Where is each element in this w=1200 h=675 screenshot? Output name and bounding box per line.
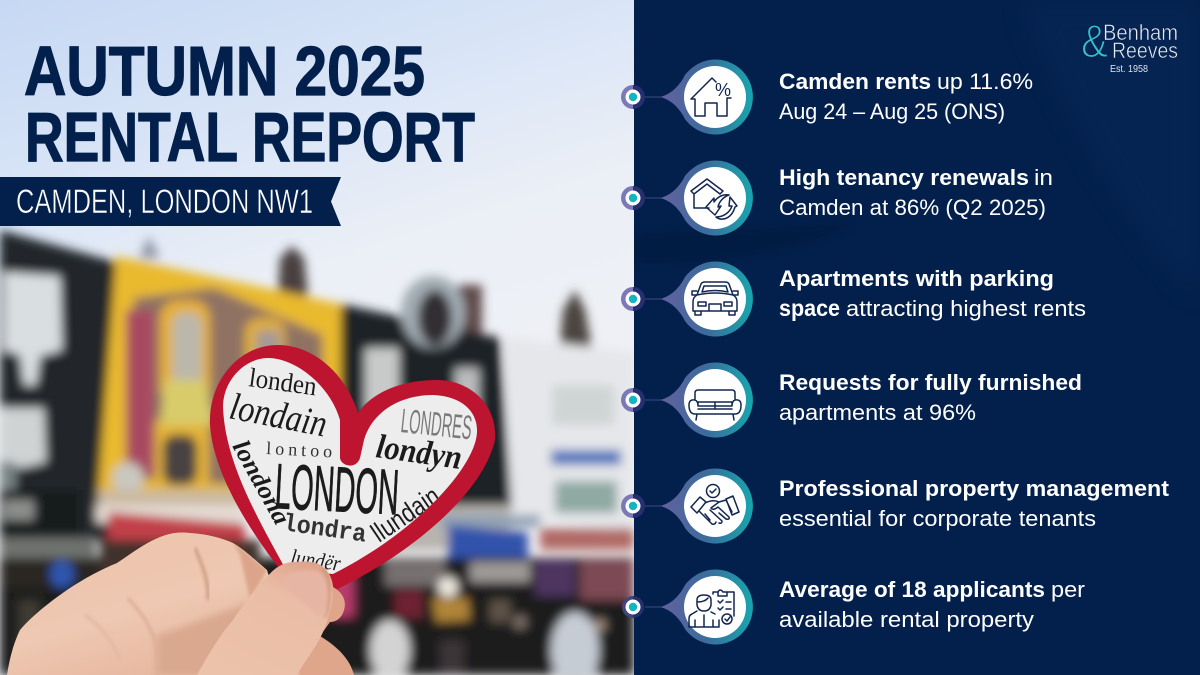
- item 6: applicants: [622, 569, 1086, 644]
- logo: Est. 1958: [1110, 63, 1148, 75]
- text 5: [779, 476, 1170, 531]
- text 6: available rental property: [779, 607, 1035, 632]
- text 3: Apartments with parking: [779, 266, 1054, 291]
- hand holding heart: [7, 532, 354, 675]
- item 2: tenancy renewals: [621, 160, 1053, 235]
- text 1: Aug 24 – Aug 25 (ONS): [779, 99, 1005, 124]
- pin and icon: house with renewal arrows: [660, 160, 753, 235]
- location ribbon: CAMDEN, LONDON NW1: [16, 183, 313, 221]
- logo: Reeves: [1112, 38, 1178, 63]
- back fingers: [299, 587, 354, 675]
- heart words: llundain: [366, 481, 445, 548]
- heart words: londain: [226, 386, 330, 446]
- logo: Benham: [1103, 20, 1178, 45]
- heart words: lontoo: [266, 438, 333, 461]
- index finger and palm: [7, 532, 300, 675]
- item 1: Camden rents: [621, 59, 1033, 134]
- heart words: lundër: [289, 544, 343, 576]
- heart words: londyn: [374, 428, 464, 477]
- text 5: essential for corporate tenants: [779, 506, 1096, 531]
- connector dot 3: [621, 287, 661, 311]
- text 4: Requests for fully furnished: [779, 370, 1082, 395]
- text 3: attracting highest rents: [846, 296, 1086, 321]
- text 6: [779, 577, 1086, 632]
- text 1: Camden rents: [779, 69, 931, 94]
- heart sticker: LONDRES: [399, 402, 474, 447]
- logo: &: [1081, 15, 1108, 67]
- pin and icon: car: [660, 261, 753, 336]
- item 4: furnished: [621, 362, 1082, 437]
- text 6: per: [1051, 577, 1086, 602]
- heart words: londen: [247, 362, 319, 401]
- thumbnail highlight: [287, 570, 327, 596]
- pin and icon: house with percent: [660, 59, 753, 134]
- connector dot 2: [621, 186, 661, 210]
- text 2: Camden at 86% (Q2 2025): [779, 195, 1046, 220]
- text 2: [779, 165, 1053, 220]
- blurred buildings: [0, 230, 634, 675]
- text 3: space: [779, 295, 840, 321]
- pin and icon: house with percent: %: [715, 80, 731, 100]
- heart words: londra: [281, 509, 368, 550]
- heart sticker: [210, 345, 495, 590]
- thumb: [197, 561, 333, 675]
- text 2: in: [1034, 165, 1053, 190]
- title: [24, 32, 475, 176]
- text 6: Average of 18 applicants: [779, 577, 1045, 602]
- heart words: [226, 362, 474, 576]
- pin and icon: applicant with clipboard: [660, 569, 753, 644]
- connector dot 4: [621, 388, 661, 412]
- text 1: [779, 69, 1033, 124]
- text 4: apartments at 96%: [779, 400, 976, 425]
- heart words: londona: [227, 436, 295, 529]
- item 5: property management: [621, 468, 1170, 543]
- location ribbon: [0, 177, 341, 226]
- item 3: parking: [621, 261, 1086, 336]
- panel: navy background: [638, 229, 827, 259]
- panel: street photo background: [0, 0, 634, 675]
- text 1: up 11.6%: [937, 69, 1033, 94]
- text 5: Professional property management: [779, 476, 1170, 501]
- connector dot 5: [621, 494, 661, 518]
- pin and icon: handshake: [660, 468, 753, 543]
- title: AUTUMN 2025: [24, 32, 425, 110]
- pin and icon: sofa: [660, 362, 753, 437]
- logo: [1081, 15, 1178, 75]
- text 4: [779, 370, 1082, 425]
- heart words: LONDON: [273, 450, 401, 528]
- text 3: [779, 266, 1086, 321]
- palm shadow: [157, 600, 250, 675]
- connector dot 6: [622, 596, 661, 618]
- title: RENTAL REPORT: [25, 98, 475, 176]
- text 2: High tenancy renewals: [779, 165, 1029, 190]
- connector dot 1: [621, 85, 661, 109]
